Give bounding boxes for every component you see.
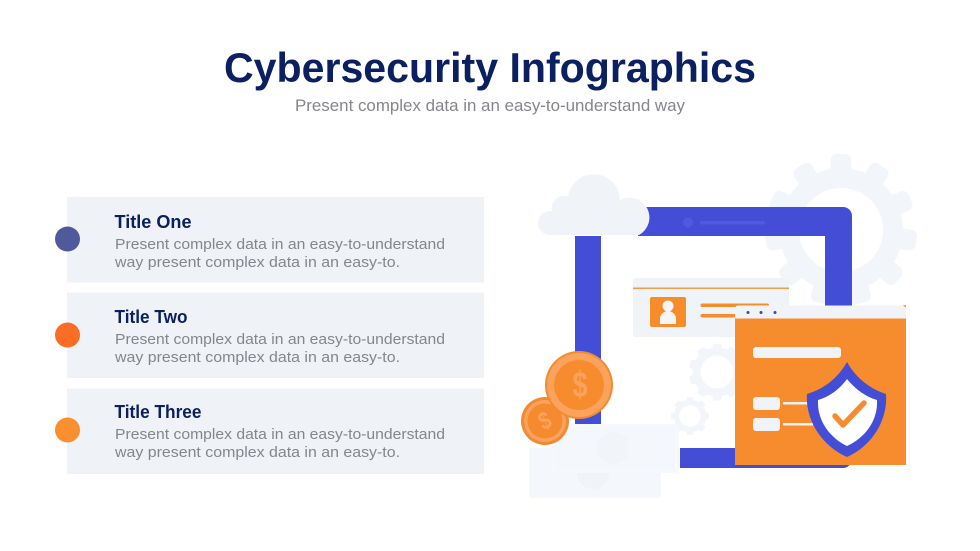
body: title two: way present complex data in an easy-to. <box>114 349 400 366</box>
body: title one <box>114 236 445 271</box>
laptop camera and speaker <box>683 218 765 228</box>
icon: large coin <box>545 351 613 419</box>
icon: small coin: $ <box>534 406 556 436</box>
icon: large background gear <box>764 154 918 306</box>
panel: title one <box>55 197 484 282</box>
body: title one: way present complex data in an easy-to. <box>114 254 400 271</box>
profile text lines <box>700 304 769 318</box>
title: Cybersecurity Infographics <box>224 44 756 91</box>
icon: small coin <box>521 397 569 445</box>
panel: title two <box>55 292 484 378</box>
icon: cloud <box>538 174 649 235</box>
heading: title three: Title Three <box>114 402 202 422</box>
marker: title one <box>55 226 80 252</box>
icon: user avatar <box>650 297 686 327</box>
icon: banknotes <box>529 424 679 498</box>
form fields <box>753 397 813 431</box>
window dots <box>746 311 776 314</box>
body: title two: Present complex data in an easy-to-understand <box>115 331 445 348</box>
icon: shield with check <box>807 362 886 457</box>
body: title one: Present complex data in an easy-to-understand <box>115 236 445 253</box>
body: title three: way present complex data in an easy-to. <box>114 444 400 461</box>
illustration: cybersecurity scene <box>521 154 918 498</box>
subtitle: Present complex data in an easy-to-understand way <box>295 97 686 115</box>
heading: title one: Title One <box>114 212 192 232</box>
laptop frame <box>575 207 852 468</box>
heading: title two: Title Two <box>114 307 188 327</box>
marker: title three <box>55 418 80 442</box>
icon: small gears <box>671 344 745 435</box>
body: title three <box>114 426 445 461</box>
body: title two <box>114 331 445 366</box>
icon: large coin: $ <box>572 364 588 405</box>
window heading bar <box>753 347 841 358</box>
marker: title two <box>55 322 80 348</box>
browser window <box>735 305 906 465</box>
body: title three: Present complex data in an easy-to-understand <box>115 426 445 443</box>
profile card <box>633 278 789 337</box>
panel: title three <box>55 388 484 474</box>
